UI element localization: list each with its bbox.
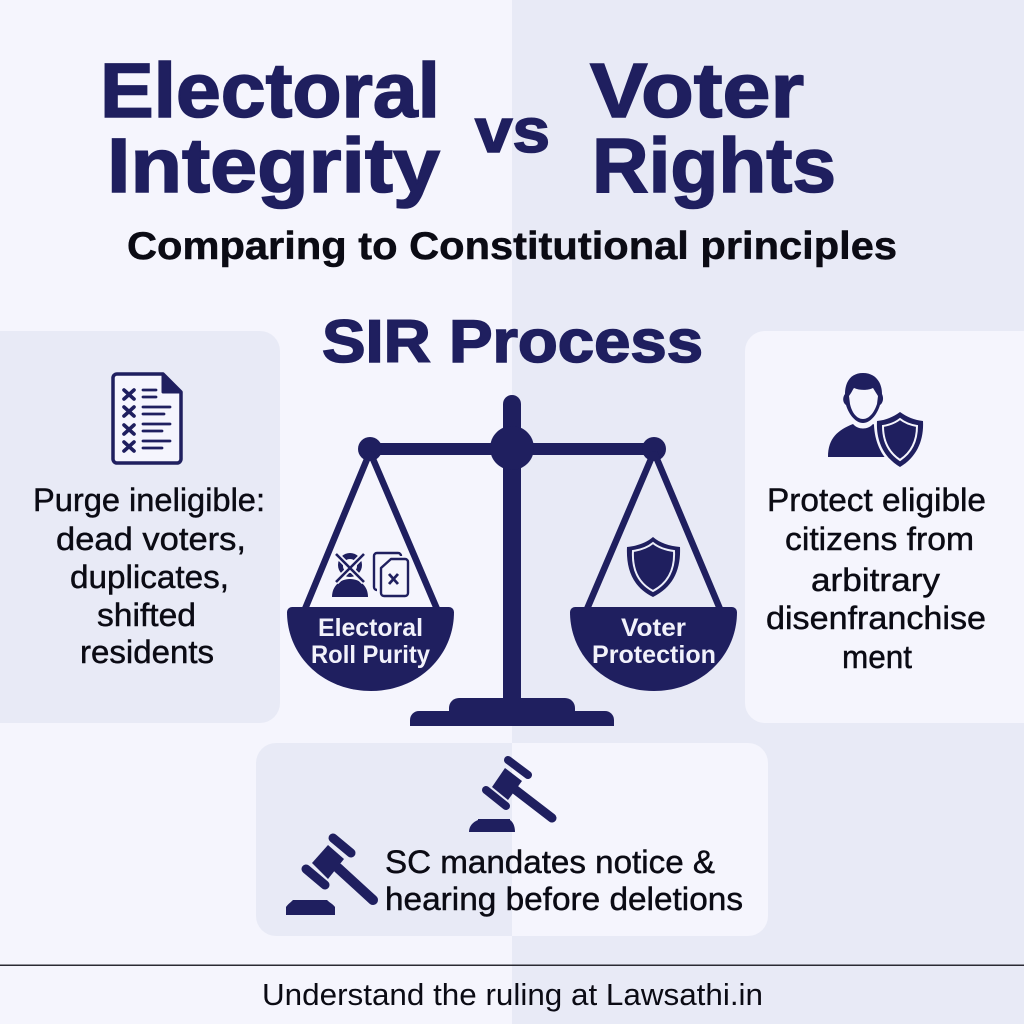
text: purge ineligible: duplicates,: [70, 559, 229, 595]
panel: purge ineligible: [0, 331, 280, 723]
icon: duplicate documents: [374, 553, 408, 596]
text: SC mandate: hearing before deletions: [385, 881, 743, 917]
balance scale: [287, 395, 737, 726]
icon: crossed-out voter: [332, 553, 368, 597]
panel: SC mandate: [256, 743, 768, 936]
icon: shield: [627, 537, 680, 597]
text: purge ineligible: dead voters,: [56, 521, 246, 557]
text: purge ineligible: shifted: [97, 597, 196, 633]
title: Integrity: [107, 123, 440, 209]
text: protect eligible citizens: citizens from: [785, 521, 974, 557]
panel: protect eligible citizens: [745, 331, 1024, 723]
heading: SIR Process: SIR Process: [322, 308, 703, 375]
text: purge ineligible: Purge ineligible:: [33, 482, 265, 518]
text: purge ineligible: [33, 482, 265, 670]
title: [100, 48, 836, 209]
text: protect eligible citizens: Protect eligible: [767, 482, 986, 518]
left pan: electoral roll purity: [287, 607, 454, 691]
subtitle: Comparing to Constitutional principles: [127, 225, 897, 268]
title: vs: [475, 97, 550, 166]
text: purge ineligible: residents: [80, 634, 214, 670]
left pan strings: [305, 452, 437, 609]
title: Voter: [590, 48, 804, 134]
title: Electoral: [100, 48, 440, 134]
left pan: electoral roll purity: Electoral: [318, 614, 423, 642]
right pan: voter protection: Protection: [592, 641, 716, 669]
right pan: voter protection: Voter: [621, 614, 686, 642]
icon: checklist document: [113, 374, 181, 463]
right pan: voter protection: [570, 607, 737, 691]
right pan strings: [587, 452, 720, 609]
text: protect eligible citizens: disenfranchise: [766, 600, 986, 636]
text: protect eligible citizens: arbitrary: [811, 562, 940, 598]
left pan: electoral roll purity: Roll Purity: [311, 641, 430, 669]
title: Rights: [592, 123, 836, 209]
icon: gavel bottom: [286, 838, 373, 915]
icon: gavel top: [469, 760, 552, 832]
text: SC mandate: SC mandates notice &: [385, 844, 715, 880]
footer: Understand the ruling at Lawsathi.in: [262, 977, 763, 1012]
text: protect eligible citizens: ment: [842, 639, 912, 675]
scale stand: [358, 395, 666, 726]
icon: person with shield: [828, 373, 926, 470]
text: protect eligible citizens: [766, 482, 986, 675]
text: SC mandate: [385, 844, 743, 917]
